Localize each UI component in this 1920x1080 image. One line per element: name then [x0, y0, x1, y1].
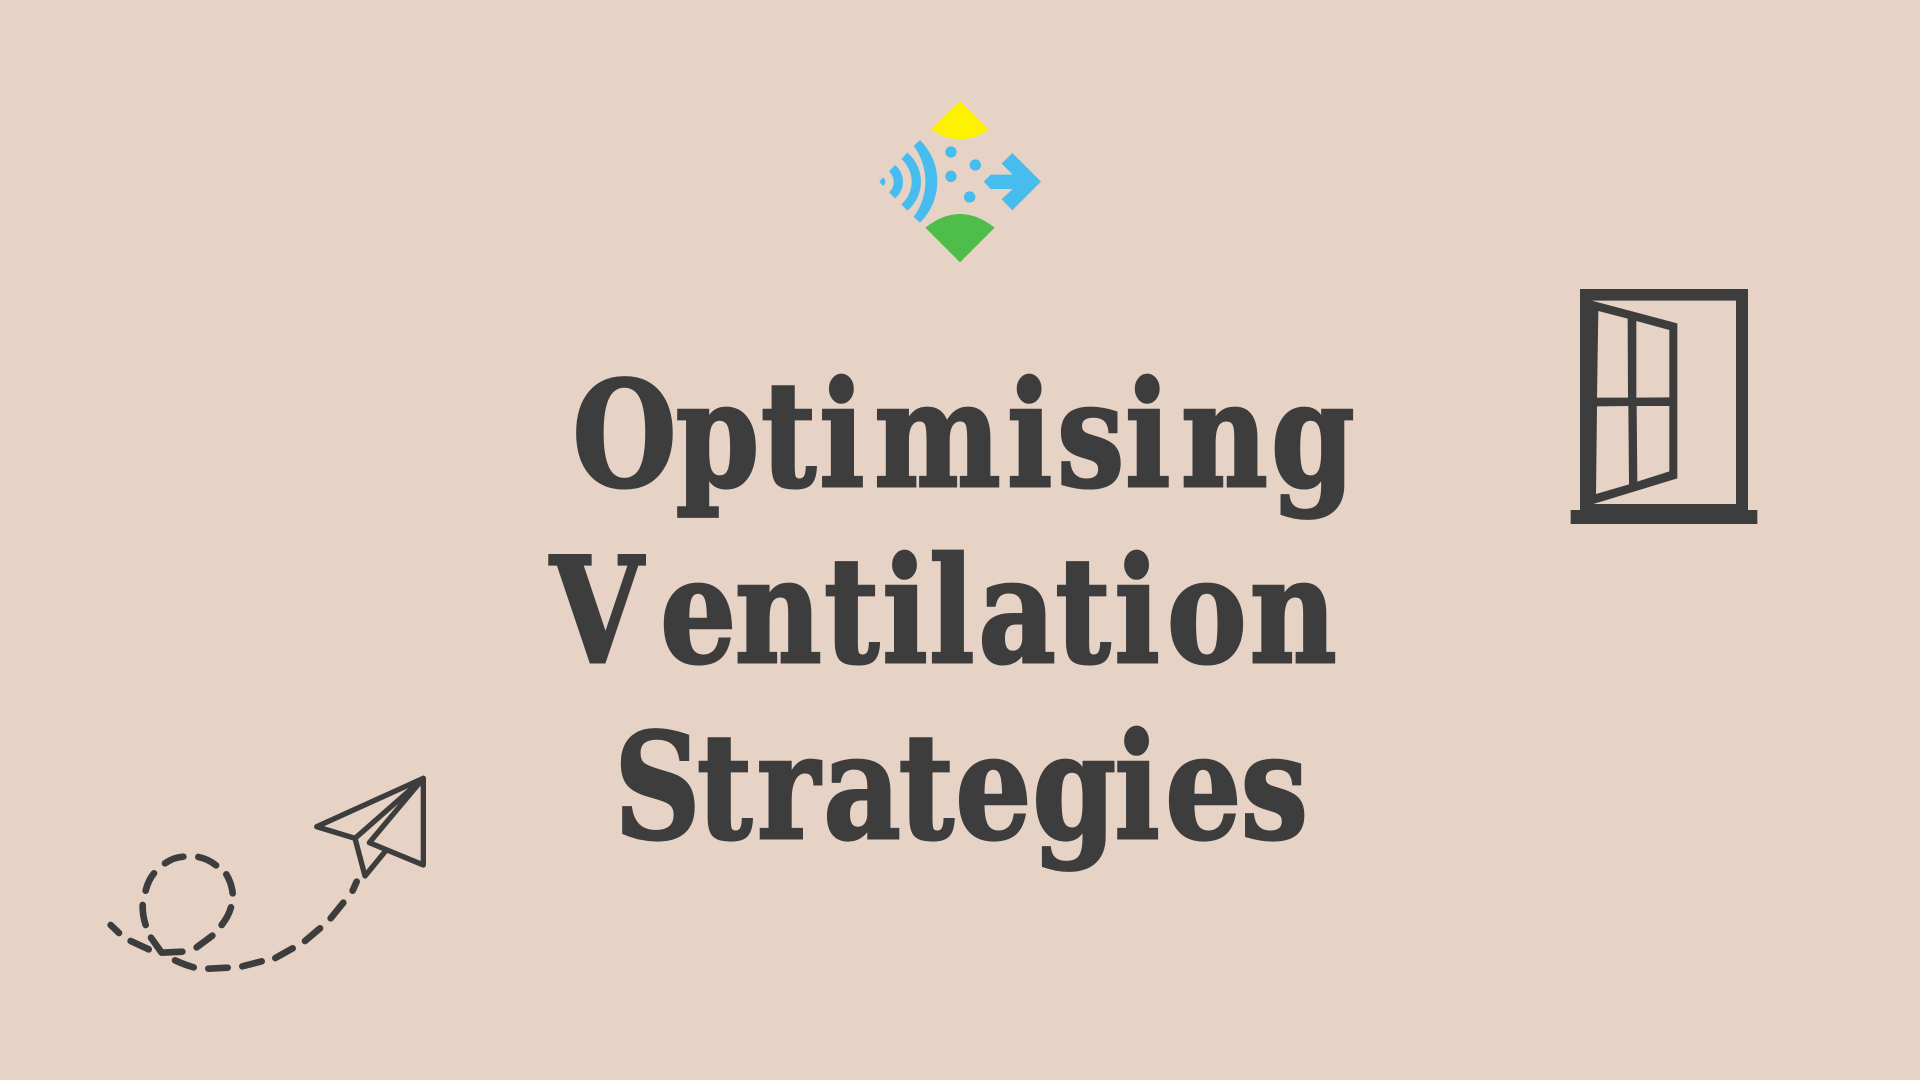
- title: Ventilation: [549, 526, 1337, 697]
- logo: green sector: [925, 214, 995, 262]
- dashed flight trail: [111, 857, 357, 969]
- title: Optimising: [572, 350, 1355, 521]
- title: [549, 350, 1355, 873]
- logo: yellow sector: [931, 101, 989, 139]
- icon: open window: [1571, 289, 1757, 524]
- logo: ventilation diamond: [879, 101, 1041, 262]
- icon: paper airplane with dashed loop trail: [111, 778, 423, 969]
- logo: blue arrow: [984, 153, 1041, 210]
- logo: blue air waves: [879, 140, 981, 223]
- paper airplane: [317, 778, 423, 876]
- title: Strategies: [614, 702, 1308, 873]
